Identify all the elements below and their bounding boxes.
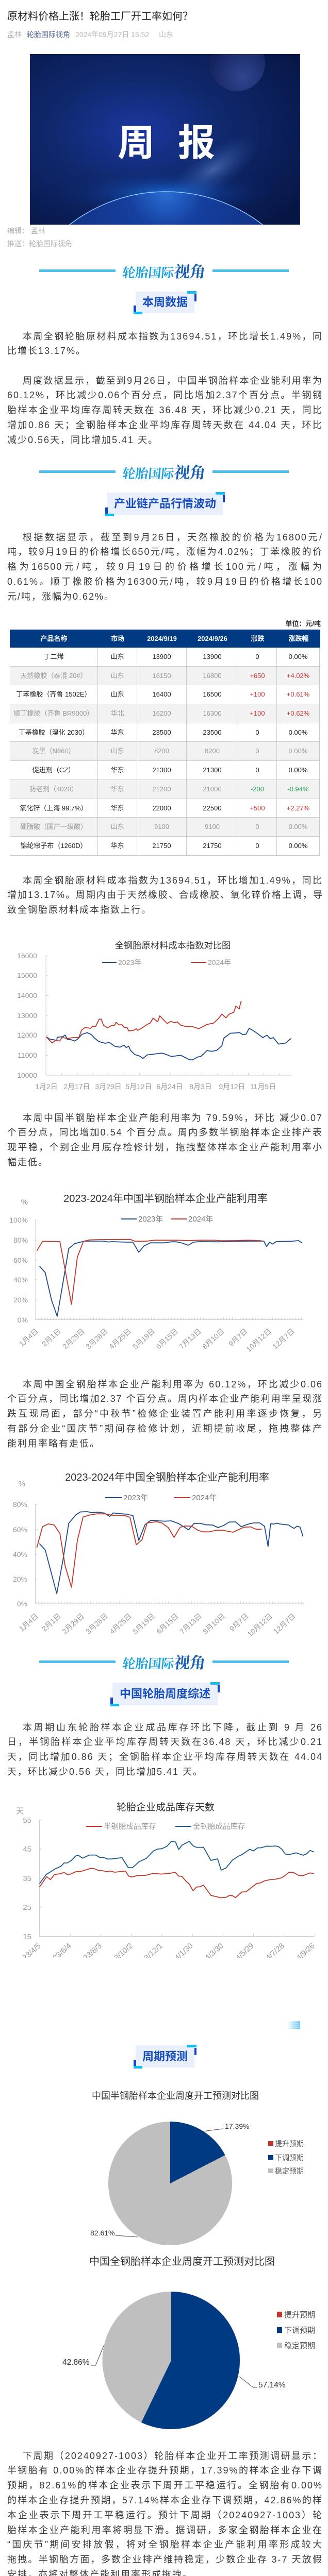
value labels xyxy=(62,2358,286,2389)
text: inventory review: 日，半钢胎样本企业平均库存周转天数在36.48 天，环比减少0.21 xyxy=(7,1737,323,1747)
y axis labels: 20% xyxy=(13,1575,27,1583)
price table: 8200 xyxy=(205,747,220,755)
legend: 提升预期 xyxy=(275,2140,304,2148)
text: price summary: 元/吨，涨幅为0.62%。 xyxy=(7,591,114,602)
price table: 0 xyxy=(255,823,259,831)
price table xyxy=(10,630,320,856)
price table: +4.02% xyxy=(287,672,309,680)
x axis labels: 11月9日 xyxy=(250,1082,276,1091)
chart title: 中国全钢胎样本企业周度开工预测对比图 xyxy=(89,2256,275,2267)
y axis labels: 40% xyxy=(13,1550,27,1558)
text: price summary xyxy=(7,532,323,602)
x axis labels: 3月29日 xyxy=(95,1082,122,1091)
price table: 16800 xyxy=(203,672,222,680)
price table: +2.27% xyxy=(287,804,309,812)
price table: 山东 xyxy=(110,653,124,660)
legend xyxy=(121,1215,213,1224)
price table: 0.00% xyxy=(289,728,307,736)
series lines xyxy=(37,1512,303,1594)
price table: 锦纶帘子布（1260D） xyxy=(20,842,87,850)
pie chart: all-steel forecast xyxy=(62,2256,315,2429)
x axis labels xyxy=(35,1082,276,1091)
heading: forecast xyxy=(136,2045,194,2067)
moon xyxy=(209,36,265,91)
chart title: 全钢胎原材料成本指数对比图 xyxy=(115,940,231,951)
text: all-steel utilisation xyxy=(7,1379,323,1449)
price table: 16400 xyxy=(152,690,171,698)
price table: 0.00% xyxy=(289,747,307,755)
price table: 山东 xyxy=(110,690,124,698)
text: cost index xyxy=(7,331,323,356)
value labels: 57.14% xyxy=(258,2381,286,2389)
price table: 9100 xyxy=(205,823,220,831)
text: next period forecast: 预期，82.61%的样本企业表示下周开工平稳运行。全钢胎有0.00% xyxy=(7,2480,323,2490)
y axis labels: 13000 xyxy=(17,1011,37,1020)
price table: 22000 xyxy=(152,804,171,812)
y axis labels xyxy=(9,1198,28,1324)
text: inventory review: 本周期山东轮胎样本企业成品库存环比下降，截止到 9 月 26 xyxy=(23,1722,323,1733)
x axis labels: 3月28日 xyxy=(84,1327,109,1351)
text: weekly data xyxy=(7,376,323,445)
text: next period forecast: 胎样本企业产能利用率将明显下滑。据调研，多家全钢胎样本企业在 xyxy=(7,2525,323,2535)
text: all-steel cost index: 本周全钢胎原材料成本指数为13694.51，环比增加1.49%，同比 xyxy=(23,875,323,886)
x axis labels: 1月4日 xyxy=(18,1612,40,1633)
x axis labels: 8月10日 xyxy=(201,1327,226,1351)
text: weekly data: 增加0.86 天；全钢胎样本企业平均库存周转天数在 44.04 天，环比 xyxy=(7,420,323,430)
x axis labels: 10月12日 xyxy=(245,1612,274,1638)
x axis labels: 5月19日 xyxy=(131,1612,156,1636)
x axis labels: 5月19日 xyxy=(131,1327,156,1351)
price table: 华东 xyxy=(110,785,124,793)
x axis labels xyxy=(18,1612,297,1638)
text: weekly data: 胎样本企业平均库存周转天数在 36.48 天，环比减少0.21 天，同比 xyxy=(7,405,323,415)
x axis labels: 10月12日 xyxy=(244,1327,273,1353)
y axis labels: 100% xyxy=(9,1216,28,1224)
heading: supply chain prices: 产业链产品行情波动 xyxy=(114,497,216,510)
price table: 16300 xyxy=(203,709,222,717)
y axis labels: 15 xyxy=(23,1933,31,1941)
text: all-steel utilisation: 个百分点，同比增加2.37 个百分点。周内样本企业产能利用率呈现涨 xyxy=(7,1394,323,1404)
text: next period forecast: 的样本企业存提升预期，57.14%样本企业存下调预期，42.86%的样 xyxy=(7,2495,323,2505)
text: next period forecast: “国庆节”期间安排放假，将对全钢胎样本企业产能利用率形成较大 xyxy=(7,2539,323,2550)
legend: 半钢胎成品库存 xyxy=(104,1822,156,1831)
legend: 2023年 xyxy=(138,1215,163,1224)
price table: 21750 xyxy=(203,842,222,850)
price table: 23500 xyxy=(203,728,222,736)
x axis labels: 8月10日 xyxy=(201,1612,226,1636)
text: weekly data: 减少0.56天，同比增加5.41 天。 xyxy=(7,435,158,445)
chart title: 中国半钢胎样本企业周度开工预测对比图 xyxy=(92,2091,259,2101)
price table: 2024/9/26 xyxy=(198,635,227,642)
text: inventory review: 天，同比增加0.86 天；全钢胎样本企业平均库存周转天数在 44.04 xyxy=(7,1752,323,1762)
article meta line: 轮胎国际视角 xyxy=(27,30,70,39)
price table: 0 xyxy=(255,766,259,774)
text: inventory review xyxy=(7,1722,323,1777)
table unit: 单位：元/吨 xyxy=(285,620,321,628)
price table: +100 xyxy=(250,690,265,698)
x axis labels: 12月7日 xyxy=(271,1327,296,1351)
legend: 2023年 xyxy=(118,958,141,967)
x axis labels: 2月29日 xyxy=(60,1612,86,1636)
price table: 华东 xyxy=(110,728,124,736)
price table: 13900 xyxy=(152,653,171,660)
x axis labels: 1月4日 xyxy=(18,1327,40,1348)
price table: 市场 xyxy=(111,635,124,642)
article meta line: 山东 xyxy=(159,30,173,39)
heading: this week data xyxy=(136,292,194,313)
y axis labels: 40% xyxy=(13,1276,28,1284)
legend: 2023年 xyxy=(123,1494,148,1502)
text: all-steel utilisation: 能利用率略有走低。 xyxy=(7,1438,100,1449)
y axis labels: 55 xyxy=(23,1816,31,1825)
legend: 稳定预期 xyxy=(275,2167,304,2175)
text: all-steel cost index xyxy=(7,875,323,915)
price table: 0.00% xyxy=(289,842,307,850)
text: semi-steel utilisation: 现平稳，个别企业月底存检修计划，拖拽整体样本企业产能利用率小 xyxy=(7,1142,323,1153)
price table: 华东 xyxy=(110,842,124,850)
price table: 山东 xyxy=(110,823,124,831)
line chart: all-steel capacity utilisation xyxy=(13,1471,304,1638)
price table: +500 xyxy=(250,804,265,812)
y axis labels: 60% xyxy=(13,1256,28,1264)
price table: 顺丁橡胶（齐鲁 BR9000） xyxy=(14,709,93,717)
x axis labels xyxy=(21,1941,317,1965)
y axis labels xyxy=(13,1480,27,1608)
price table: 13900 xyxy=(203,653,222,660)
x axis labels: 3月28日 xyxy=(84,1612,109,1636)
legend xyxy=(268,2140,304,2175)
publisher credit: 推送：轮胎国际视角 xyxy=(7,240,72,248)
price table: 0 xyxy=(255,842,259,850)
faded brand fragment xyxy=(287,2021,300,2029)
price table: 21000 xyxy=(203,785,222,793)
text: price summary: 0.61%。顺丁橡胶价格为16300元/吨，较9月19日的价格增长100 xyxy=(7,577,323,587)
y axis labels: 25 xyxy=(23,1903,31,1912)
price table: 22500 xyxy=(203,804,222,812)
y axis labels: 12000 xyxy=(17,1031,37,1039)
line chart: semi-steel capacity utilisation xyxy=(9,1193,303,1353)
article meta line xyxy=(7,30,173,39)
legend: 2024年 xyxy=(208,958,231,967)
price table: 丁二烯 xyxy=(43,653,64,660)
y axis labels xyxy=(16,1807,31,1941)
price table: 21200 xyxy=(152,785,171,793)
legend xyxy=(277,2311,315,2350)
price table: 16200 xyxy=(152,709,171,717)
price table: 0 xyxy=(255,728,259,736)
text: next period forecast: 下周期（20240927-1003）轮胎样本企业开工率预测调研显示： xyxy=(23,2451,323,2461)
price table: 华东 xyxy=(110,766,124,774)
price table: 硬脂酸（国产一级酸） xyxy=(20,823,87,831)
price table: 防老剂（4020） xyxy=(29,785,78,793)
brand divider: 轮胎国际视角 xyxy=(122,259,206,282)
x axis labels: 5月12日 xyxy=(125,1082,152,1091)
x axis labels: 9月7日 xyxy=(228,1612,250,1633)
price table: 丁基橡胶（溴化 2030） xyxy=(19,728,89,736)
y axis labels: 14000 xyxy=(17,991,37,999)
text: semi-steel utilisation: 个百分点，同比增加0.54 个百分点。周内多数半钢胎样本企业排产表 xyxy=(7,1127,323,1138)
text: price summary: 格为16500元/吨，较9月19日的价格增长100元/吨，涨幅为 xyxy=(7,562,323,572)
price table: +100 xyxy=(250,709,265,717)
x axis labels: 4月25日 xyxy=(107,1327,133,1351)
chart title: 轮胎企业成品库存天数 xyxy=(117,1802,215,1813)
y axis labels: 20% xyxy=(13,1296,28,1304)
x axis labels: 9月12日 xyxy=(219,1082,245,1091)
y axis labels: 60% xyxy=(13,1526,27,1534)
x axis labels: 1月2日 xyxy=(35,1082,58,1091)
y axis labels: % xyxy=(21,1198,28,1207)
brand divider: 轮胎国际视角 xyxy=(122,1650,206,1673)
line chart: all-steel raw material cost index xyxy=(17,940,292,1091)
text: inventory review: 天，环比减少0.56 天，同比增加5.41 天。 xyxy=(7,1767,203,1777)
brand divider: 轮胎国际视角 xyxy=(122,460,206,483)
price table: 产品名称 xyxy=(40,635,67,642)
price table: 华北 xyxy=(110,709,124,717)
chart title: 2023-2024年中国全钢胎样本企业产能利用率 xyxy=(65,1471,269,1483)
y axis labels: 10000 xyxy=(17,1071,37,1079)
value labels: 82.61% xyxy=(90,2229,114,2237)
text: all-steel cost index: 致全钢胎原材料成本指数上行。 xyxy=(7,905,152,915)
y axis labels xyxy=(17,952,37,1079)
x axis labels: 12月7日 xyxy=(272,1612,297,1636)
price table: 16500 xyxy=(203,690,222,698)
x axis labels: 2月17日 xyxy=(63,1082,90,1091)
heading: weekly report: 周 xyxy=(118,123,155,164)
price table: 涨跌 xyxy=(251,635,264,642)
series lines xyxy=(40,1841,314,1898)
legend: 2024年 xyxy=(188,1215,213,1224)
text: semi-steel utilisation xyxy=(7,1113,323,1167)
heading: this week data: 本周数据 xyxy=(142,296,188,309)
pie chart: semi-steel forecast xyxy=(90,2091,304,2245)
text: price summary: 吨，较9月19日的价格增长650元/吨，涨幅为4.02%；丁苯橡胶的价 xyxy=(7,547,323,557)
price table: +650 xyxy=(250,672,265,680)
price table: 2024/9/19 xyxy=(147,635,177,642)
x axis labels: 2月1日 xyxy=(40,1327,62,1348)
text: semi-steel utilisation: 本周中国半钢胎样本企业产能利用率为 79.59%，环比 减少0.07 xyxy=(23,1113,323,1123)
price table: 丁苯橡胶（齐鲁 1502E） xyxy=(16,690,91,698)
price table: 炭黑（N660） xyxy=(32,747,75,755)
brand divider xyxy=(39,1650,289,1673)
price table: 山东 xyxy=(110,747,124,755)
x axis labels: 9月7日 xyxy=(227,1327,249,1348)
x axis labels: 2月29日 xyxy=(61,1327,86,1351)
price table: -0.94% xyxy=(287,785,309,793)
series lines xyxy=(37,1240,302,1316)
price table: 21750 xyxy=(152,842,171,850)
text: all-steel cost index: 增加13.17%。周期内由于天然橡胶、合成橡胶、氧化锌价格上调，导 xyxy=(7,890,323,900)
legend: 下调预期 xyxy=(275,2154,304,2162)
text: weekly data: 60.12%，环比减少0.06个百分点，同比增加2.37个百分点。半钢钢 xyxy=(7,390,323,400)
y axis labels: 天 xyxy=(16,1807,24,1816)
price table: 氧化锌（上海 99.7%） xyxy=(20,804,88,812)
planet xyxy=(9,192,323,506)
heading: forecast: 周期预测 xyxy=(142,2050,188,2063)
text: weekly data: 周度数据显示，截至到9月26日，中国半钢胎样本企业能利用率为 xyxy=(23,376,323,386)
legend xyxy=(86,1822,245,1831)
y axis labels: 15000 xyxy=(17,971,37,979)
y axis labels: 16000 xyxy=(17,952,37,960)
price table: 0.00% xyxy=(289,823,307,831)
price table: 0.00% xyxy=(289,653,307,660)
x axis labels: 6月15日 xyxy=(155,1612,180,1636)
value labels: 17.39% xyxy=(225,2122,249,2130)
price table: +0.61% xyxy=(287,690,309,698)
x axis labels: 4月25日 xyxy=(108,1612,133,1636)
y axis labels: 11000 xyxy=(18,1051,37,1059)
price table: 促进剂（CZ） xyxy=(32,766,75,774)
series lines xyxy=(46,1002,291,1060)
legend xyxy=(102,958,231,967)
y axis labels: 35 xyxy=(23,1874,31,1883)
x axis labels: 6月15日 xyxy=(154,1327,179,1351)
legend: 稳定预期 xyxy=(284,2342,315,2350)
x axis labels xyxy=(18,1327,296,1353)
text: cost index: 比增长13.17%。 xyxy=(7,346,86,356)
legend: 提升预期 xyxy=(284,2311,315,2319)
text: cost index: 本周全钢轮胎原材料成本指数为13694.51，环比增长1.49%，同 xyxy=(23,331,323,342)
price table: +0.62% xyxy=(287,709,309,717)
text: all-steel utilisation: 本周中国全钢胎样本企业产能利用率为 60.12%，环比减少0.06 xyxy=(23,1379,323,1389)
price table: 山东 xyxy=(110,672,124,680)
price table: 8200 xyxy=(154,747,169,755)
text: semi-steel utilisation: 幅走低。 xyxy=(7,1157,48,1167)
heading: weekly report xyxy=(118,123,215,164)
price table: 天然橡胶（泰混 20#） xyxy=(20,672,87,680)
y axis labels: 80% xyxy=(13,1500,27,1509)
article meta line: 2024年09月27日 15:52 xyxy=(75,30,149,39)
price table: 21300 xyxy=(203,766,222,774)
title: 原材料价格上涨！轮胎工厂开工率如何？ xyxy=(7,11,193,22)
x axis labels: 8月3日 xyxy=(189,1082,212,1091)
y axis labels: 80% xyxy=(13,1236,28,1244)
brand divider xyxy=(39,460,289,483)
price table: 0 xyxy=(255,747,259,755)
hero image: weekly report with moon and planet xyxy=(30,54,300,225)
chart title: 2023-2024年中国半钢胎样本企业产能利用率 xyxy=(63,1193,268,1205)
text: all-steel utilisation: 跌互现局面，部分“中秋节”检修企业装置产能利用率逐步恢复，另 xyxy=(7,1409,323,1419)
line chart: inventory days xyxy=(16,1802,317,1958)
price table: 16150 xyxy=(152,672,171,680)
heading: China tyre weekly review: 中国轮胎周度综述 xyxy=(120,1687,210,1700)
price table: 23500 xyxy=(152,728,171,736)
x axis labels: 2月1日 xyxy=(40,1612,62,1633)
price table: 0 xyxy=(255,653,259,660)
legend: 全钢胎成品库存 xyxy=(193,1822,245,1831)
text: price summary: 根据数据显示，截至到9月26日，天然橡胶的价格为16800元/ xyxy=(23,532,323,543)
x axis labels: 7月13日 xyxy=(178,1612,203,1636)
price table: 9100 xyxy=(154,823,169,831)
legend: 2024年 xyxy=(192,1494,217,1502)
x axis labels: 7月13日 xyxy=(177,1327,203,1351)
value labels xyxy=(90,2122,249,2237)
value labels: 42.86% xyxy=(62,2358,90,2367)
heading: weekly report: 报 xyxy=(178,123,215,164)
y axis labels: % xyxy=(19,1480,25,1488)
heading: China tyre weekly review xyxy=(112,1683,218,1705)
legend: 下调预期 xyxy=(284,2326,315,2335)
y axis labels: 0% xyxy=(17,1600,27,1608)
heading: supply chain prices xyxy=(107,493,223,515)
brand divider xyxy=(39,259,289,282)
y axis labels: 45 xyxy=(23,1845,31,1854)
y axis labels: 0% xyxy=(18,1316,28,1324)
price table: -200 xyxy=(251,785,264,793)
editor credit: 编辑： 孟林 xyxy=(7,227,45,235)
text: next period forecast: 拖拽。半钢胎方面，多数企业排产维持稳定，少数企业存 3-7 天放假 xyxy=(7,2554,323,2565)
text: next period forecast xyxy=(7,2451,323,2576)
legend xyxy=(105,1494,217,1502)
price table: 21300 xyxy=(152,766,171,774)
text: next period forecast: 半钢胎有 0.00%的样本企业存提升预期，17.39%的样本企业存下调 xyxy=(7,2465,323,2476)
price table: 涨跌幅 xyxy=(288,635,308,642)
x axis labels: 6月24日 xyxy=(156,1082,183,1091)
text: next period forecast: 本企业表示下周开工平稳运行。预计下周期（20240927-1003）轮 xyxy=(7,2510,323,2520)
price table: 华东 xyxy=(110,804,124,812)
article meta line: 孟林 xyxy=(7,30,22,39)
text: all-steel utilisation: 有部分企业“国庆节”期间存检修计划，近期提前收尾，拖拽整体产 xyxy=(7,1423,323,1434)
price table: 0.00% xyxy=(289,766,307,774)
